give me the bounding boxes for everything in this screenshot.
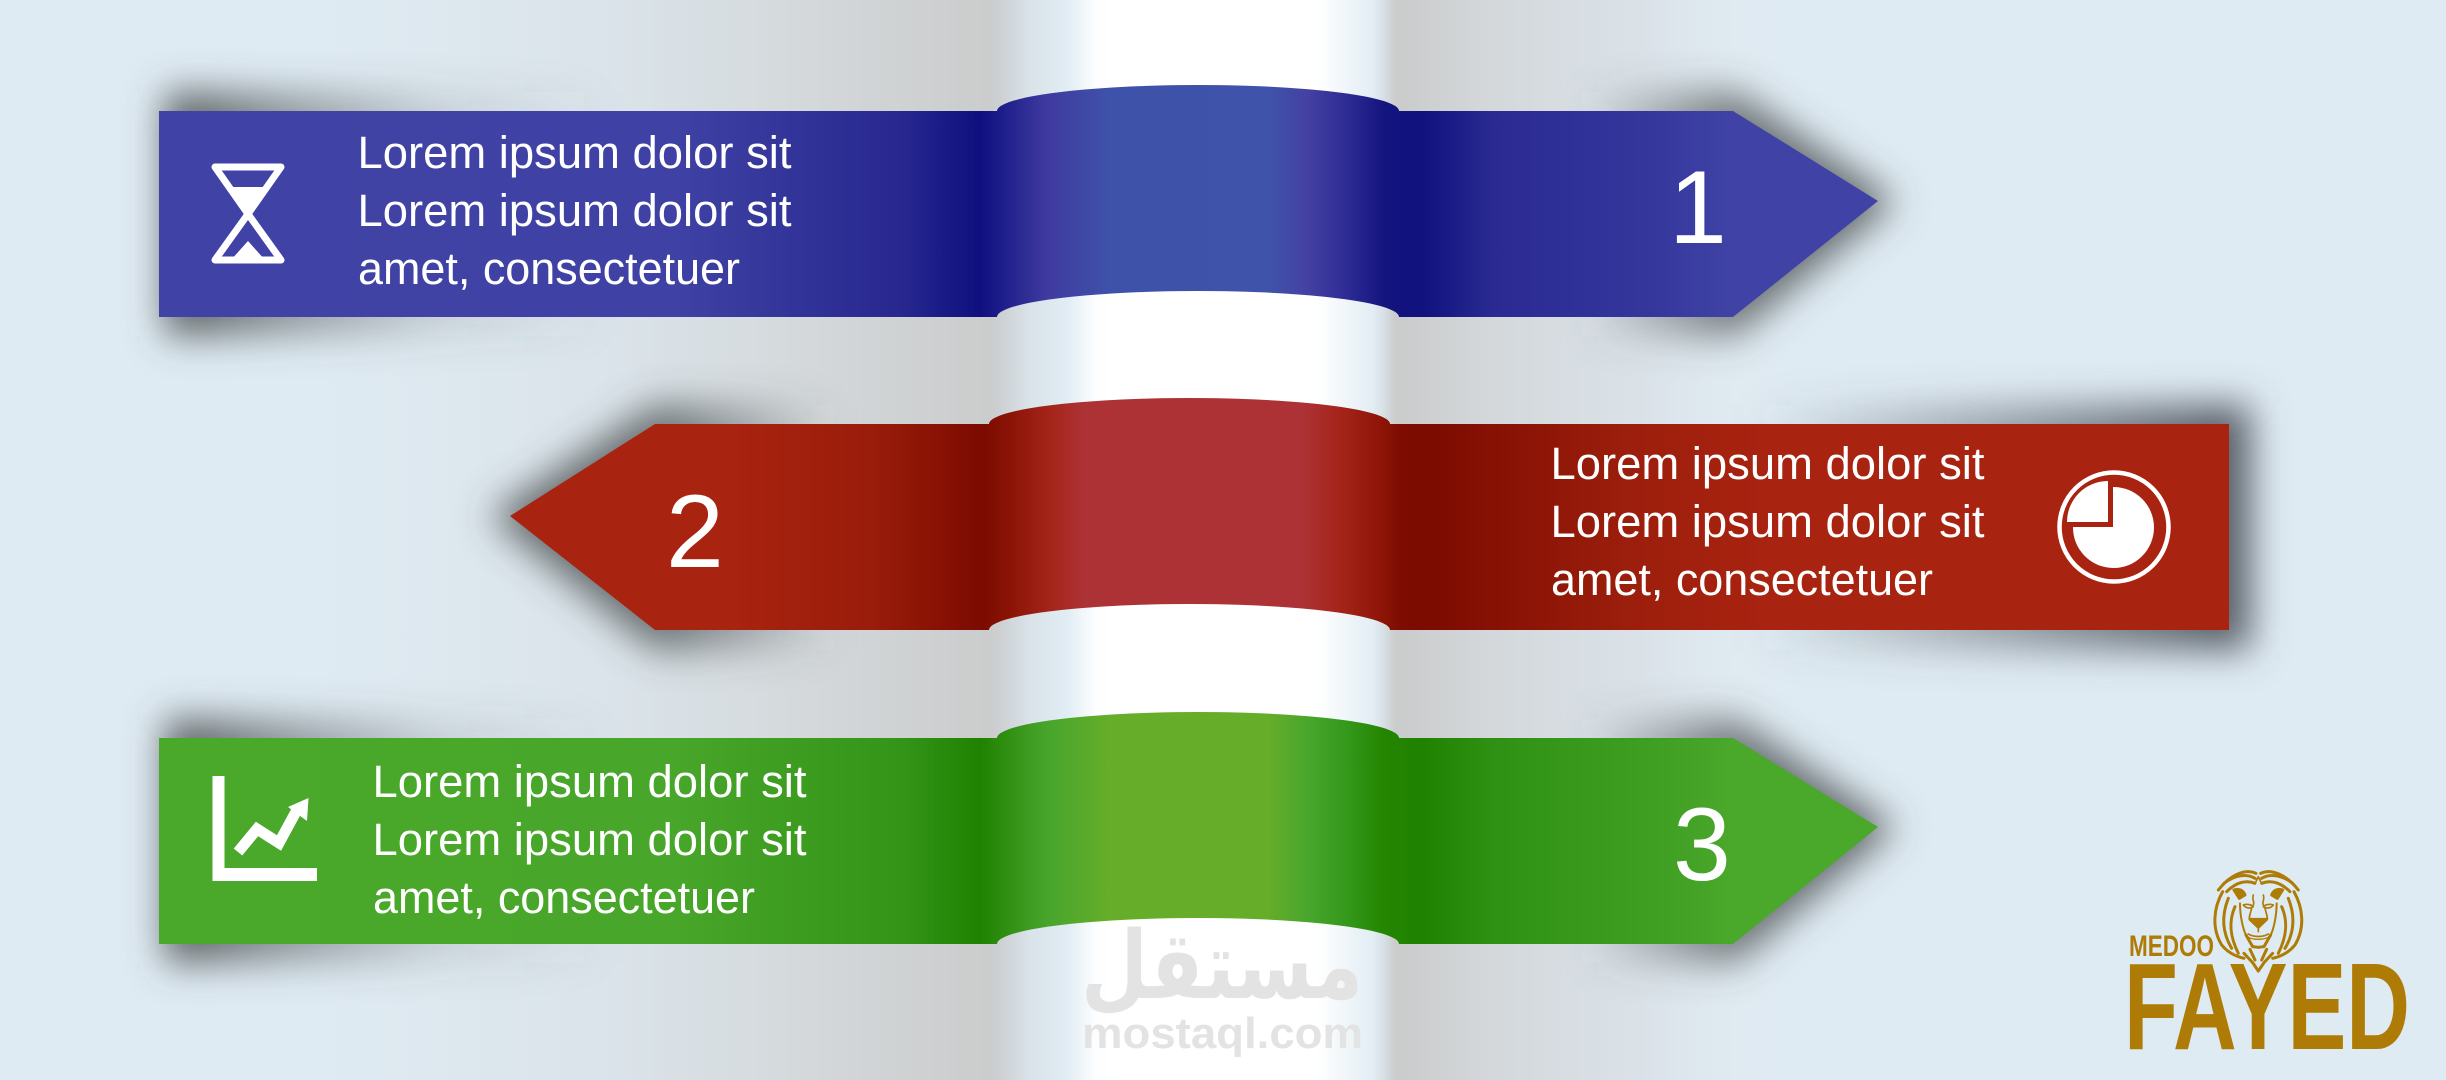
ribbon 1 shadow: [165, 92, 1896, 336]
panel: ribbon 1 blue: [159, 85, 1896, 336]
logo: Medoo Fayed: [2124, 872, 2410, 1076]
ribbon 1 text: Lorem ipsum dolor sit: [358, 127, 792, 178]
ribbon 1 text: Lorem ipsum dolor sit: [358, 185, 792, 236]
number 1: 1: [1669, 150, 1727, 266]
panel: ribbon 2 red: [490, 398, 2250, 650]
panel: ribbon 3 green: [159, 712, 1896, 963]
ribbon 2 arrow shape: [510, 398, 2229, 630]
ribbon 3 text: amet, consectetuer: [373, 872, 755, 923]
ribbon 3 text: [372, 756, 807, 923]
ribbon 1 text: amet, consectetuer: [358, 243, 740, 294]
ribbon 3 text: Lorem ipsum dolor sit: [372, 756, 807, 807]
watermark: mostaql: mostaql.com: [1082, 1009, 1363, 1058]
ribbon 1 arrow shape: [159, 85, 1878, 317]
ribbon 2 text: [1550, 438, 1985, 605]
ribbon 3 shadow: [165, 719, 1896, 963]
number 2: 2: [666, 474, 724, 590]
icon: lion head: [2215, 872, 2302, 971]
ribbon 2 text: amet, consectetuer: [1551, 554, 1933, 605]
ribbon 3 arrow shape: [159, 712, 1878, 944]
ribbon 2 shadow: [490, 405, 2250, 650]
icon: pie chart: [2060, 472, 2168, 582]
watermark: mostaql: مستقل: [1081, 912, 1363, 1021]
ribbon 3 text: Lorem ipsum dolor sit: [372, 814, 807, 865]
logo text MEDOO: MEDOO: [2129, 930, 2214, 963]
ribbon 1 text: [358, 127, 792, 294]
ribbon 2 text: Lorem ipsum dolor sit: [1550, 438, 1985, 489]
icon: hourglass: [215, 167, 281, 260]
watermark: mostaql: [1081, 912, 1363, 1058]
number 3: 3: [1673, 787, 1731, 903]
ribbon 2 text: Lorem ipsum dolor sit: [1550, 496, 1985, 547]
icon: growth chart: [212, 776, 317, 881]
